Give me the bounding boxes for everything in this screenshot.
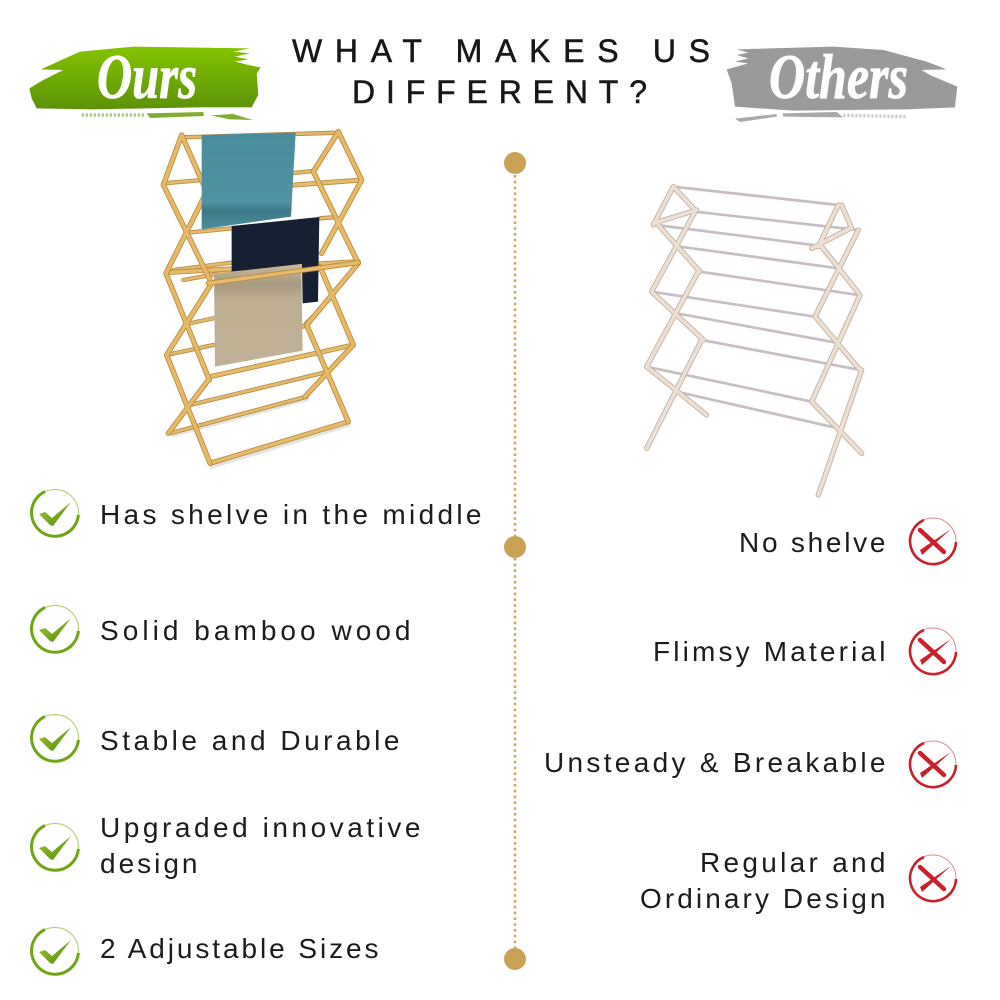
feature: stable: Stable and Durable [100, 725, 400, 756]
drawback: unsteady [544, 741, 956, 787]
badge: Others: Others [769, 41, 908, 112]
title [292, 33, 710, 110]
towel: navy [232, 217, 319, 303]
feature: shelve [32, 490, 482, 536]
badge: Ours: Ours [97, 41, 197, 112]
drawback: ordinary: Regular and [700, 847, 886, 878]
photo: white wooden drying rack [647, 187, 862, 495]
drawback: flimsy: Flimsy Material [653, 636, 886, 667]
feature: stable [32, 714, 400, 762]
feature: bamboo [32, 606, 410, 652]
timeline divider [504, 152, 526, 970]
title: DIFFERENT? [352, 74, 647, 110]
feature: sizes [32, 928, 378, 974]
feature: shelve: Has shelve in the middle [100, 499, 482, 530]
feature: design [32, 812, 420, 879]
badge: Ours [29, 41, 261, 120]
drawback: ordinary: Ordinary Design [640, 883, 886, 914]
drawback: unsteady: Unsteady & Breakable [544, 747, 886, 778]
feature: design: design [100, 848, 198, 879]
title: WHAT MAKES US [292, 33, 710, 69]
timeline dot top [504, 152, 526, 174]
feature: sizes: 2 Adjustable Sizes [100, 933, 378, 964]
drawback: no shelve [739, 518, 956, 564]
timeline dot middle [504, 536, 526, 558]
towel: beige [214, 264, 303, 367]
badge: Others [727, 41, 957, 122]
photo: bamboo drying rack with towels [163, 132, 362, 467]
drawback: no shelve: No shelve [739, 527, 886, 558]
drawback: ordinary [640, 847, 956, 914]
drawback: flimsy [653, 628, 956, 674]
towel: teal [202, 133, 296, 229]
feature: bamboo: Solid bamboo wood [100, 615, 410, 646]
list: others drawbacks [544, 518, 956, 914]
list: ours features [32, 490, 482, 974]
timeline dot bottom [504, 948, 526, 970]
feature: design: Upgraded innovative [100, 812, 420, 843]
